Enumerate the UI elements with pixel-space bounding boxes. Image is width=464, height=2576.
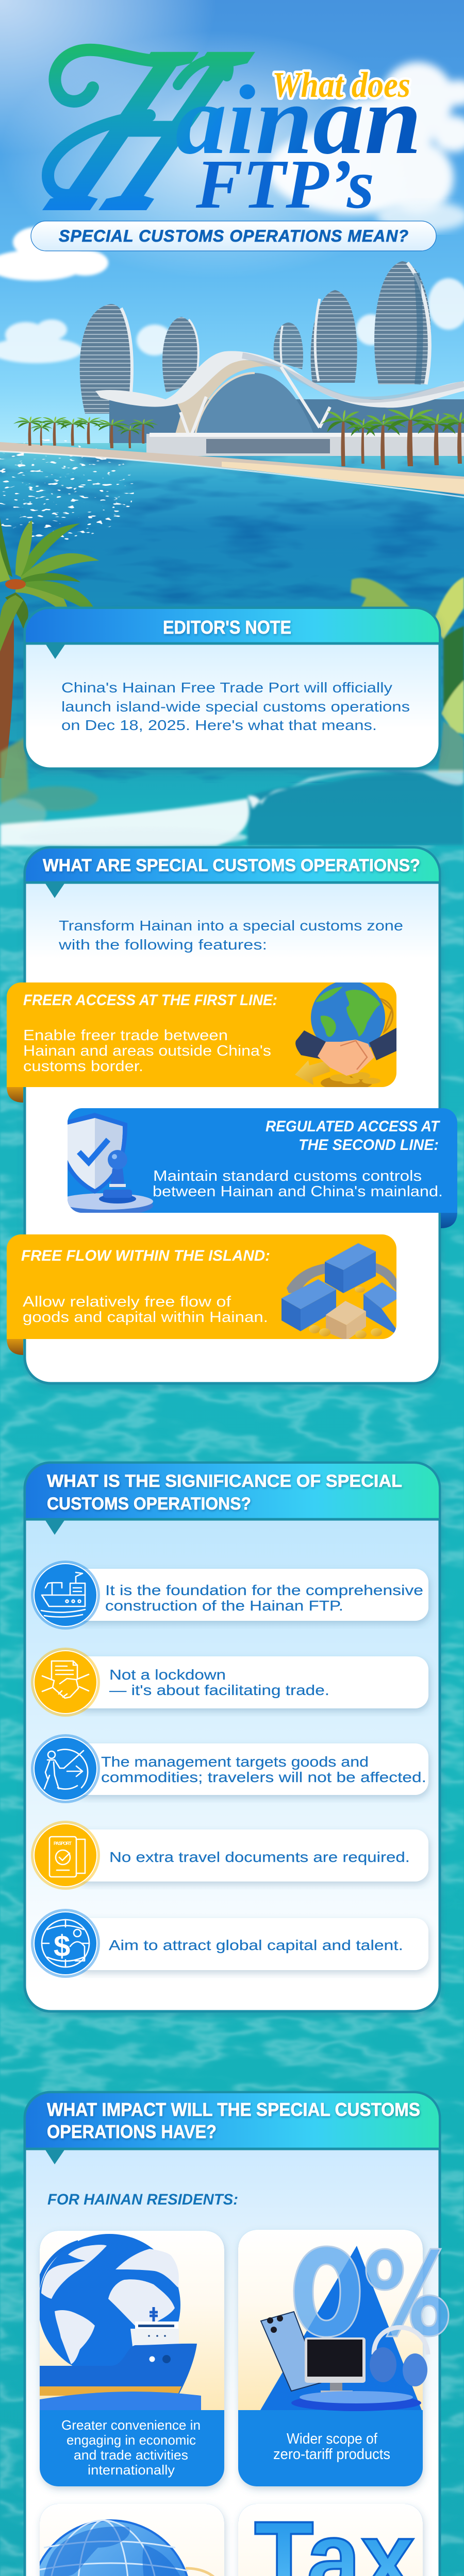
item text: No extra travel documents are required. [109,1849,410,1865]
feature: free flow [7,1234,402,1355]
background: upper water ripples [0,453,464,783]
illustration: globe and ship [31,2231,224,2411]
panel: significance [25,1463,440,2011]
feature: first line: Hainan and areas outside China's [23,1043,271,1059]
panel header: OPERATIONS HAVE? [47,2121,217,2142]
feature: free flow: Allow relatively free flow of [23,1294,231,1310]
item text: Not a lockdown [109,1667,226,1683]
panel body [25,1463,440,2011]
title word: FTP's: FTP’s [195,146,374,223]
hero towers [80,261,431,414]
title word: Hainan: ainan [175,65,422,175]
illustration: zero percent and devices [260,2246,449,2411]
breaking wave [0,770,464,846]
panel header: CUSTOMS OPERATIONS? [47,1494,251,1514]
item text: commodities; travelers will not be affected. [101,1769,426,1785]
item text: — it's about facilitating trade. [109,1682,329,1698]
icon: containers [281,1243,402,1341]
title word: What does: What does [272,65,410,105]
item text [109,1667,329,1698]
card text: engaging in economic [67,2432,196,2448]
feature: first line: customs border. [23,1058,143,1075]
title: What does Hainan FTP's [13,0,422,260]
card text: internationally [88,2462,175,2478]
note text: China's Hainan Free Trade Port will officially [61,680,392,696]
item 4 [31,1821,428,1890]
title word: Hainan [13,0,422,260]
icon: passport: PASPORT [54,1841,72,1846]
item text [101,1754,426,1785]
card: capital flow [31,2504,224,2576]
feature: second line: between Hainan and China's mainland. [153,1183,443,1200]
card text: Greater convenience in [61,2417,201,2433]
note text: on Dec 18, 2025. Here's what that means. [61,717,377,733]
intro text: Transform Hainan into a special customs zone [59,918,403,934]
feature: first line: Enable freer trade between [23,1027,228,1044]
blurred leaves lower left [0,737,98,829]
feature: free flow: goods and capital within Hainan. [23,1309,268,1326]
card text: zero-tariff products [273,2446,390,2463]
hero: palm row [13,408,464,469]
intro text: with the following features: [58,937,267,953]
clouds [0,62,464,363]
icon: globe and dollar [31,1909,100,1978]
item text: The management targets goods and [101,1754,369,1770]
panel body [25,848,440,1383]
panel header: WHAT IMPACT WILL THE SPECIAL CUSTOMS [47,2099,420,2120]
card: lowest income tax [238,2500,423,2576]
item text: Aim to attract global capital and talent. [109,1937,403,1953]
background: sky [0,0,464,453]
card text [273,2431,390,2463]
feature: second line: Maintain standard customs controls [153,1168,422,1184]
icon: ship [31,1561,100,1630]
icon: trade document handshake [31,1648,100,1717]
card: zero tariff [238,2230,449,2486]
feature: first line [7,980,396,1103]
panel: editor's note [25,608,440,769]
hero: beach [0,442,464,497]
icon: globe and dollar: $ [54,1929,70,1963]
panel header: WHAT IS THE SIGNIFICANCE OF SPECIAL [47,1471,402,1491]
subtitle pill: SPECIAL CUSTOMS OPERATIONS MEAN? [59,227,408,245]
card text: Wider scope of [287,2431,378,2447]
item 1 [31,1561,428,1630]
item text: It is the foundation for the comprehensive [105,1582,423,1598]
card text: and trade activities [74,2447,188,2463]
background: sky glow [0,0,433,278]
panel header [25,1464,440,1535]
panel header: WHAT ARE SPECIAL CUSTOMS OPERATIONS? [43,856,420,875]
title word: Hainan: H [13,0,287,260]
background: turquoise caustics [0,845,464,2576]
feature: second line: THE SECOND LINE: [299,1137,439,1154]
feature: free flow: FREE FLOW WITHIN THE ISLAND: [21,1247,270,1264]
panel body [25,2092,440,2576]
heading: for Hainan residents: FOR HAINAN RESIDENTS: [47,2191,238,2208]
background: sun glints [0,439,134,540]
illustration: glass globe with coins [31,2504,224,2576]
intro text [58,918,403,953]
icon: shield and stamp [68,1113,153,1213]
big palm left [0,518,99,778]
panel body [25,608,440,769]
panel header [25,609,440,659]
item text: construction of the Hainan FTP. [105,1598,343,1614]
panel header [25,849,440,898]
item 2 [31,1648,428,1717]
item 3 [31,1734,428,1803]
panel: impact [25,2092,449,2576]
icon: traveler and no goods [31,1734,100,1803]
blurred leaves right [351,577,464,773]
feature: second line [56,1108,457,1228]
feature: second line: REGULATED ACCESS AT [266,1118,440,1135]
feature: first line: FREER ACCESS AT THE FIRST LINE: [23,992,277,1009]
note text [61,680,410,733]
panel header [25,2093,440,2164]
panel header: EDITOR'S NOTE [163,617,291,638]
item 5 [31,1909,428,1978]
icon: globe and handshake [295,980,396,1090]
card: greater convenience [31,2231,224,2486]
card text [61,2417,201,2478]
hero: convention building [95,351,464,456]
note text: launch island-wide special customs operations [61,699,410,715]
panel: what are special customs operations [7,848,457,1383]
subtitle pill [31,221,436,251]
item text [105,1582,423,1614]
icon: passport [31,1821,100,1890]
